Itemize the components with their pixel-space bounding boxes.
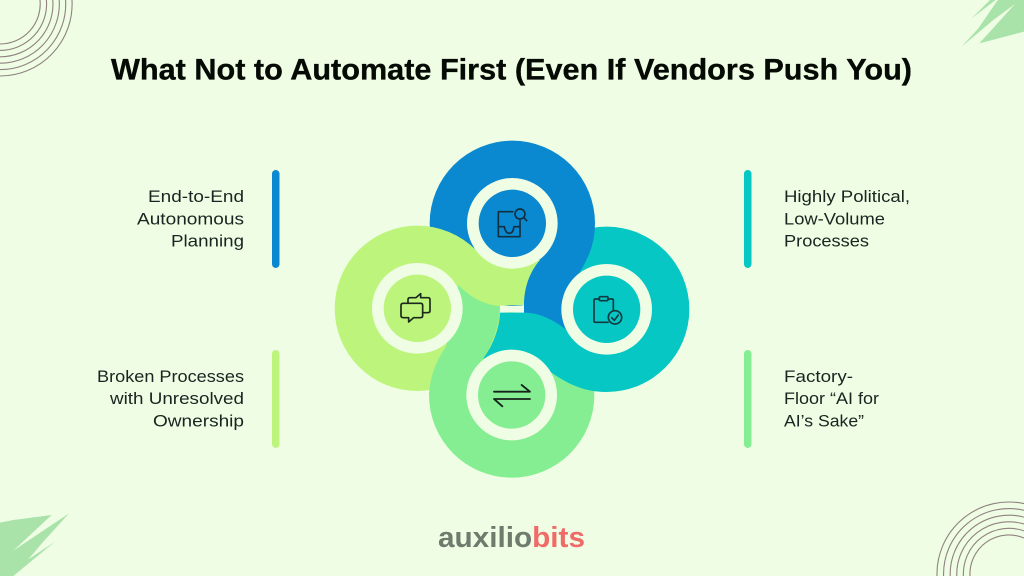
text: End-to-End Autonomous Planning: Autonomous xyxy=(137,210,244,228)
decoration: leaves top right xyxy=(962,0,1024,47)
decoration: leaves bottom left xyxy=(0,513,69,576)
bar: blue xyxy=(272,170,280,268)
loop: lime xyxy=(335,226,540,391)
diagram: interlocking four-loop ribbon xyxy=(335,141,689,478)
node: light green xyxy=(466,350,557,440)
node: lime xyxy=(372,263,463,354)
text: Broken Processes with Unresolved Ownership: Broken Processes xyxy=(97,367,244,386)
panel: Broken Processes with Unresolved Ownership xyxy=(97,350,280,448)
text: End-to-End Autonomous Planning: End-to-End xyxy=(148,187,244,206)
text: Factory-Floor AI for AI's Sake xyxy=(784,367,879,430)
bar: green xyxy=(744,350,752,448)
decoration: concentric arcs bottom right xyxy=(937,502,1024,576)
panel: Highly Political, Low-Volume Processes xyxy=(744,170,910,268)
panel: End-to-End Autonomous Planning xyxy=(137,170,280,268)
logo: auxiliobits: auxiliobits xyxy=(438,522,585,554)
bar: teal xyxy=(744,170,752,268)
loop: blue xyxy=(430,141,595,330)
text: Highly Political, Low-Volume Processes xyxy=(784,187,910,250)
title: What Not to Automate First (Even If Vendors Push You) xyxy=(111,54,912,86)
text: Factory-Floor AI for AI's Sake: Floor “AI for xyxy=(784,389,879,408)
text: Broken Processes with Unresolved Ownership xyxy=(97,367,244,430)
text: End-to-End Autonomous Planning xyxy=(137,187,244,250)
icon: swap arrows xyxy=(494,385,530,406)
loop: teal xyxy=(483,227,689,392)
text: Broken Processes with Unresolved Ownership: with Unresolved xyxy=(109,389,244,408)
panel: Factory-Floor AI for AI's Sake xyxy=(744,350,879,448)
bar: lime xyxy=(272,350,280,448)
text: Highly Political, Low-Volume Processes: Low-Volume xyxy=(784,210,885,228)
text: Factory-Floor AI for AI's Sake: AI’s Sake” xyxy=(784,412,864,430)
node: blue xyxy=(467,178,558,269)
text: Broken Processes with Unresolved Ownership: Ownership xyxy=(153,412,244,430)
loop: light green xyxy=(429,312,594,478)
loop: light green tail xyxy=(429,285,512,395)
decoration: concentric arcs top left xyxy=(0,0,72,76)
node: teal xyxy=(561,264,652,355)
icon: chat bubbles xyxy=(401,294,430,322)
text: Highly Political, Low-Volume Processes: Highly Political, xyxy=(784,187,910,206)
text: Factory-Floor AI for AI's Sake: Factory- xyxy=(784,367,853,386)
icon: inbox with magnifier xyxy=(498,209,527,237)
icon: clipboard with check xyxy=(594,297,622,324)
text: End-to-End Autonomous Planning: Planning xyxy=(171,232,244,250)
text: Highly Political, Low-Volume Processes: Processes xyxy=(784,232,869,250)
